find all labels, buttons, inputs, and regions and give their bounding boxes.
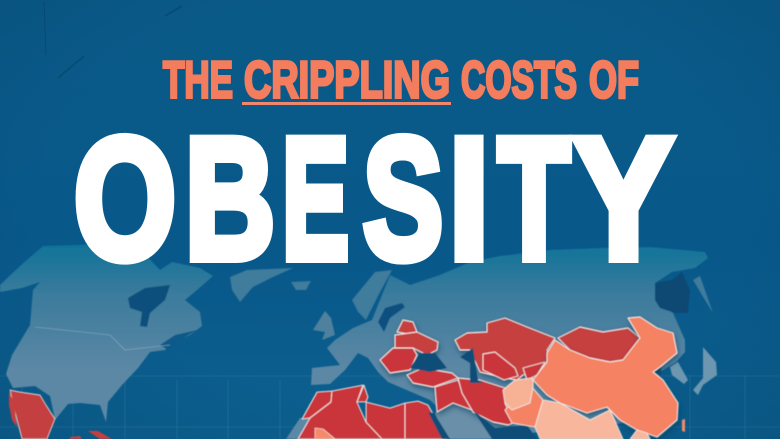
map: mali patch — [315, 428, 335, 439]
map: caspian and black sea — [410, 348, 662, 439]
map: india and south asia — [535, 400, 650, 439]
map: eurasia — [311, 247, 713, 439]
map: central and west asia — [380, 318, 640, 425]
map: arabia — [435, 403, 503, 439]
title: S — [363, 103, 443, 295]
map: western sahara — [286, 418, 310, 439]
title: I — [449, 103, 489, 295]
map: greenland and iceland — [230, 268, 311, 302]
title: Y — [574, 103, 673, 295]
title: T — [498, 103, 570, 295]
title: O — [74, 103, 176, 295]
world map — [0, 243, 717, 439]
map: mexico and caribbean — [9, 390, 112, 439]
map: sea of okhotsk — [655, 272, 690, 313]
subtitle: OF — [589, 52, 639, 110]
subtitle: CRIPPLING — [244, 52, 450, 110]
map: afghanistan — [503, 378, 533, 410]
subtitle — [163, 52, 639, 110]
title — [74, 103, 673, 295]
title: B — [185, 103, 275, 295]
subtitle: COSTS — [461, 52, 577, 110]
subtitle: THE — [163, 52, 233, 110]
map: north america — [0, 243, 213, 422]
map: pakistan — [505, 385, 543, 427]
map: japan and korea — [670, 347, 717, 395]
title: E — [282, 103, 349, 295]
subtitle underline — [242, 102, 451, 105]
map: china — [533, 317, 678, 437]
map: north africa — [298, 385, 447, 439]
map: taiwan — [682, 419, 685, 432]
